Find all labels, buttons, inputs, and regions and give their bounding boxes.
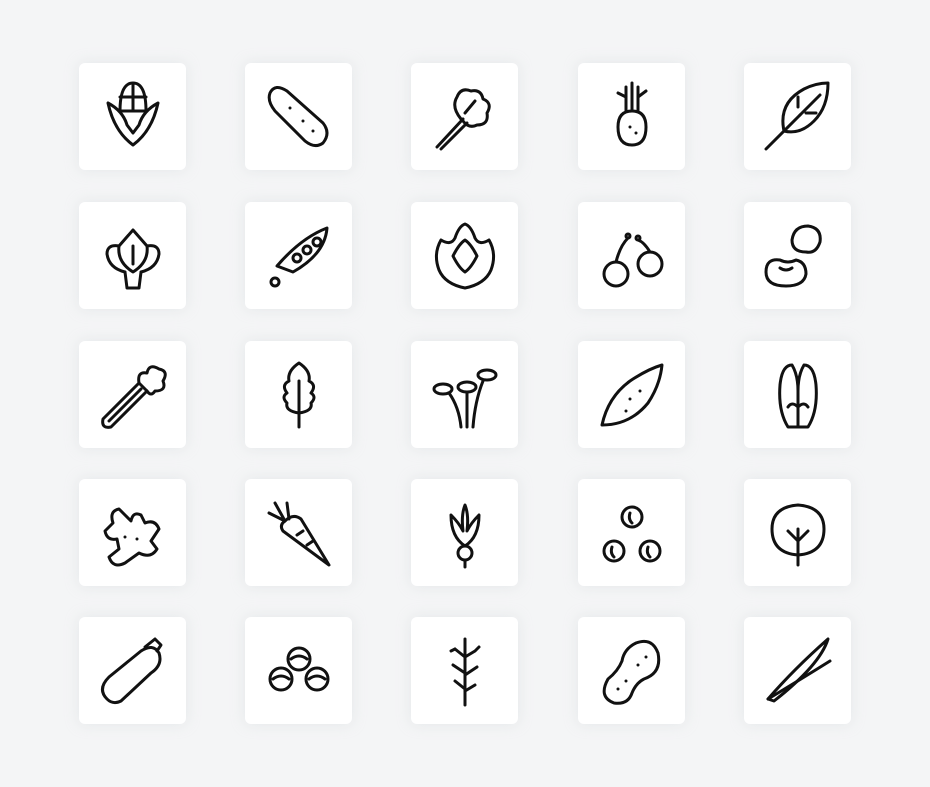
tile: zucchini (79, 617, 186, 724)
tile: celery (79, 341, 186, 448)
tile: beans (744, 202, 851, 309)
tile: leaf (744, 63, 851, 170)
tile: spinach leaf (744, 479, 851, 586)
tile: cherries (578, 202, 685, 309)
tile: cucumber (245, 63, 352, 170)
tile: radish (411, 479, 518, 586)
tile: bok choy (744, 341, 851, 448)
tile: corn (79, 63, 186, 170)
tile: artichoke (79, 202, 186, 309)
tile: enoki mushrooms (411, 341, 518, 448)
tile: brussels sprouts (245, 617, 352, 724)
tile: carrot (245, 479, 352, 586)
tile: ginger (79, 479, 186, 586)
tile: pea pod (245, 202, 352, 309)
tile: bok choy sprig (411, 63, 518, 170)
tile: oak leaf (245, 341, 352, 448)
tile: peas (578, 479, 685, 586)
tile: sweet potato (578, 341, 685, 448)
tile: lettuce (411, 202, 518, 309)
tile: celeriac (578, 63, 685, 170)
tile: peanut (578, 617, 685, 724)
tile: green beans (744, 617, 851, 724)
tile: herb sprig (411, 617, 518, 724)
